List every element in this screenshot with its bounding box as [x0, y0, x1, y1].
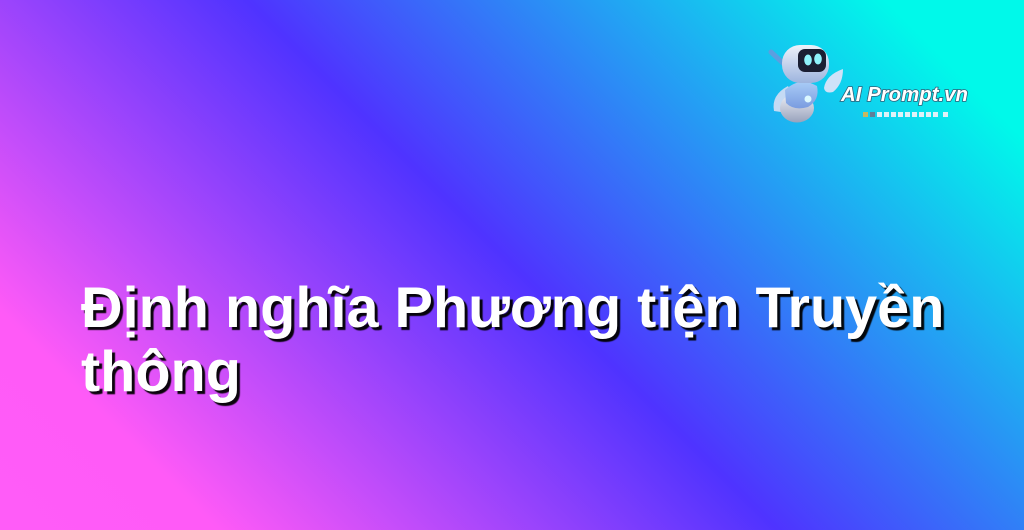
- title: Định nghĩa Phương tiện Truyền thông: [81, 276, 944, 404]
- logo tagline dots: [863, 112, 948, 117]
- logo wordmark: AI Prompt.vn: [840, 83, 968, 106]
- icon: robot mascot: [771, 45, 843, 122]
- logo: AI Prompt.vn robot: [768, 45, 968, 122]
